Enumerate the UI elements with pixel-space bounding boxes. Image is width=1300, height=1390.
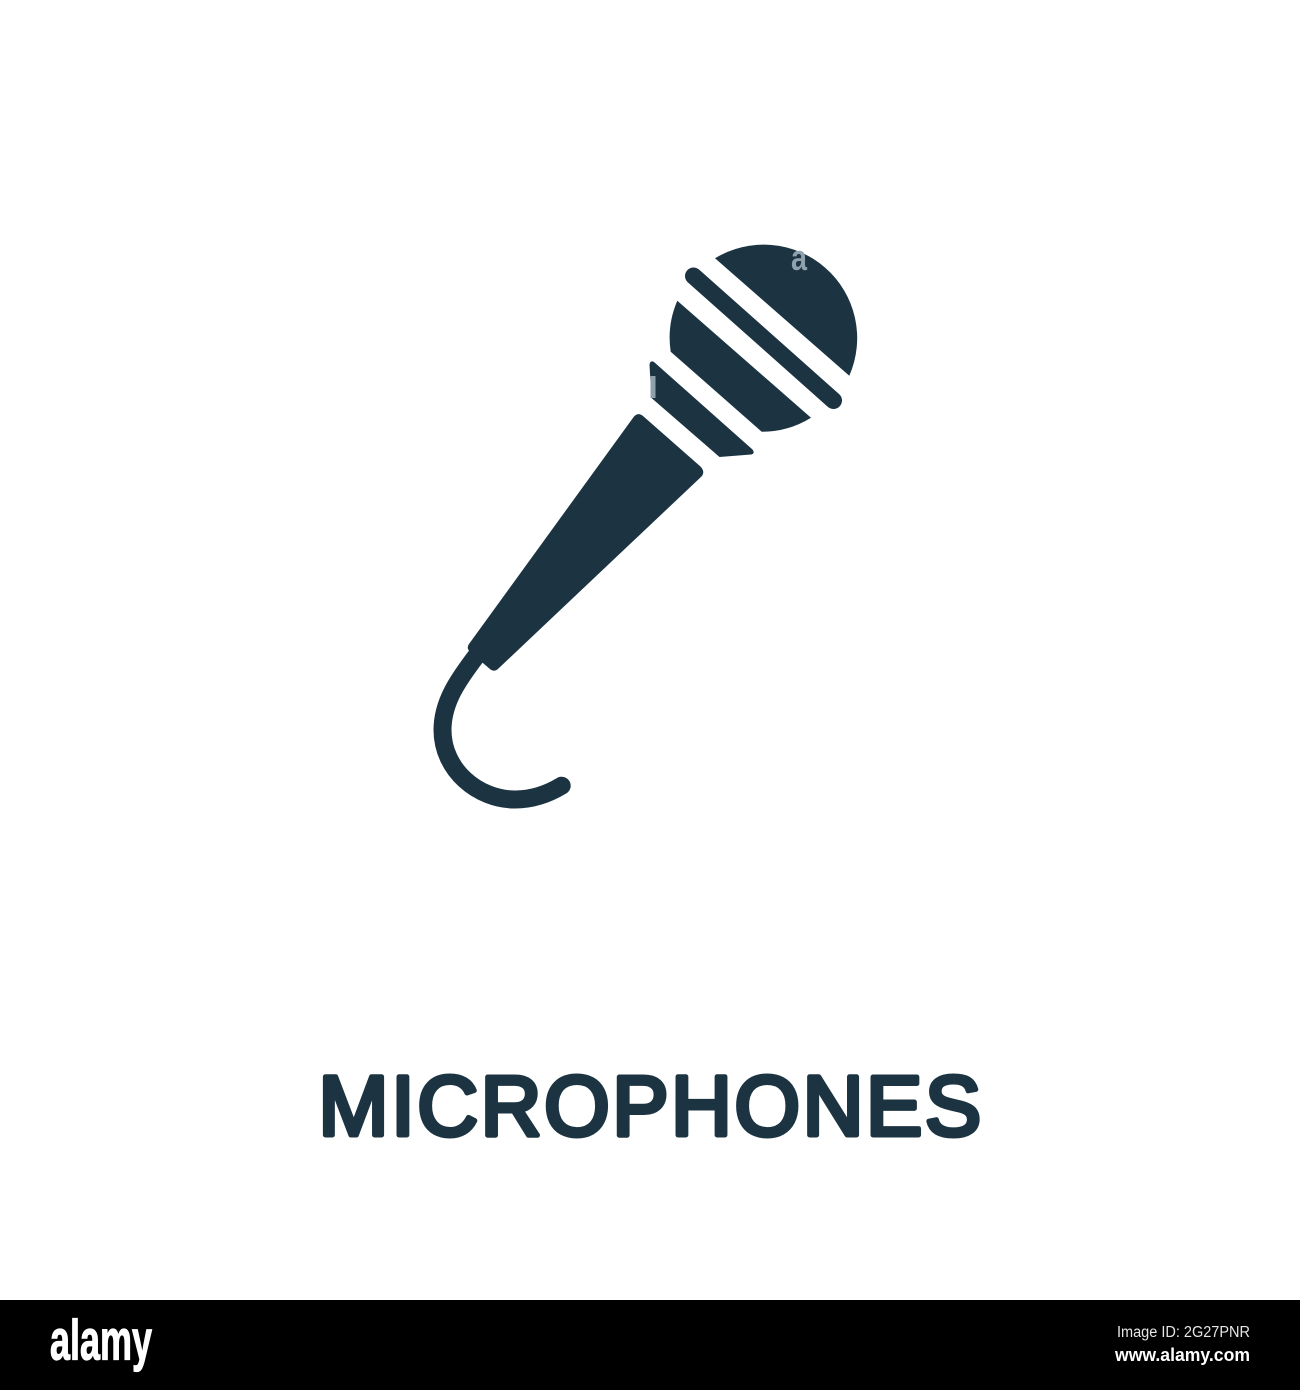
watermark fragment on microphone head: a <box>791 237 808 278</box>
microphone handle <box>468 414 703 671</box>
microphone head top segment <box>715 245 857 376</box>
microphone head lower segment <box>670 301 811 432</box>
footer bar <box>0 1300 1300 1390</box>
microphone head band <box>694 276 834 400</box>
footer website: www.alamy.com <box>1114 1345 1250 1365</box>
icon: microphone <box>442 245 857 799</box>
microphone cable <box>442 655 562 800</box>
footer image id: Image ID: 2G27PNR <box>1117 1324 1250 1341</box>
watermark fragment on collar <box>650 376 656 398</box>
footer logo: alamy: alamy <box>50 1308 152 1372</box>
microphone collar <box>650 361 754 457</box>
title: MICROPHONES: MICROPHONES <box>318 1059 981 1153</box>
